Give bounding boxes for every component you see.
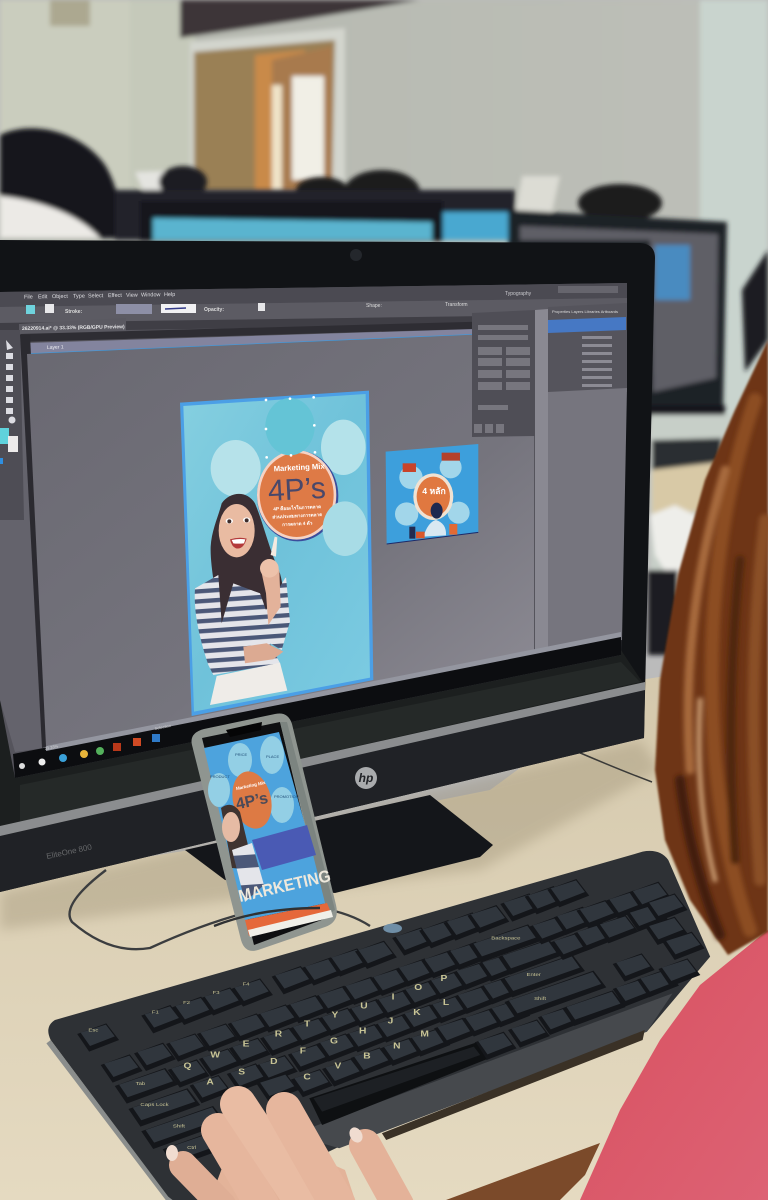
heading badge: 4P คืออะไรในการตลาด — [273, 503, 321, 512]
key legends: S — [238, 1067, 245, 1076]
menu bar: Effect — [108, 293, 122, 299]
control bar — [0, 298, 627, 323]
typing hand — [166, 1104, 398, 1200]
application window — [0, 283, 627, 778]
function key legends: Shift — [534, 997, 547, 1002]
menu bar: File — [24, 294, 33, 301]
function key legends: Backspace — [491, 936, 521, 941]
menu bar — [0, 283, 627, 307]
function key legends: F2 — [183, 1001, 190, 1006]
infographic poster on artboard — [180, 391, 373, 716]
control bar: Transform — [445, 302, 468, 308]
function key legends — [88, 936, 547, 1151]
thumbnail infographic: 4 หลัก: 4 หลัก — [422, 486, 446, 496]
menu bar: View — [126, 293, 138, 299]
function key legends: Caps Lock — [140, 1102, 169, 1108]
key legends: C — [303, 1072, 311, 1081]
silver trim line — [0, 682, 645, 836]
control bar: Stroke: — [65, 309, 83, 315]
control bar: Shape: — [366, 303, 382, 309]
phone circle headings: PLACE — [266, 754, 279, 759]
key legends: D — [270, 1057, 278, 1066]
heading badge: 4P’s — [267, 472, 327, 508]
key legends: Q — [183, 1061, 191, 1070]
menu bar: Edit — [38, 294, 48, 300]
phone circle headings: PRODUCT — [210, 774, 230, 779]
key legends: I — [392, 992, 394, 1001]
background: classroom wall and door — [0, 0, 768, 430]
windows taskbar: Selection — [154, 723, 171, 731]
artboard breadcrumb bar — [26, 327, 540, 354]
function key legends: F3 — [213, 991, 220, 996]
computer monitor — [0, 240, 655, 892]
space bar — [309, 1043, 487, 1125]
circle: right top — [321, 420, 366, 475]
screen — [0, 283, 627, 778]
poster background — [180, 391, 373, 716]
phone cable overlap — [214, 908, 320, 926]
phone footer — [245, 903, 332, 936]
student's pink shirt — [580, 930, 768, 1200]
key legends: K — [413, 1008, 421, 1017]
circle: right lower — [323, 501, 367, 556]
background: classmates and monitors — [0, 128, 768, 655]
monitor stand — [185, 795, 493, 893]
key legends: N — [393, 1041, 401, 1050]
menu bar: Window — [141, 292, 161, 299]
layers panel: Properties Layers Libraries Artboards — [552, 309, 618, 314]
key legends: J — [388, 1016, 393, 1025]
menu bar: Typography — [505, 291, 532, 297]
key legends: H — [359, 1026, 367, 1035]
keyboard — [46, 851, 710, 1200]
smartphone showing the infographic — [192, 713, 337, 951]
fingernails — [166, 1145, 178, 1161]
key legends: R — [275, 1030, 283, 1038]
key legends: Y — [331, 1011, 338, 1019]
illustrator tools panel — [0, 330, 50, 752]
function key legends: Enter — [527, 973, 541, 978]
thumbnail infographic: 4 หลัก — [386, 444, 478, 544]
circle: left — [211, 440, 261, 497]
phone info circles — [208, 736, 294, 823]
phone badge — [227, 767, 277, 833]
monitor bezel — [0, 240, 655, 892]
character panel — [472, 310, 535, 437]
heading badge — [257, 450, 338, 541]
student's long brown hair — [655, 340, 768, 955]
phone badge: 4P’s — [234, 790, 270, 813]
phone woman — [221, 805, 264, 902]
key legends: A — [206, 1077, 214, 1086]
phone badge: Marketing Mix — [235, 780, 266, 791]
key legends: T — [304, 1020, 311, 1028]
function key legends: Shift — [173, 1124, 185, 1129]
key legends: O — [414, 983, 422, 992]
function key legends: F4 — [243, 982, 250, 987]
cable behind the monitor — [578, 752, 652, 782]
palm rest lip — [314, 993, 673, 1148]
hp logo — [355, 767, 377, 789]
key legends: M — [420, 1030, 429, 1038]
lower right panel — [548, 388, 627, 650]
function key legends: Esc — [88, 1028, 99, 1033]
function key legends: Tab — [136, 1081, 145, 1087]
top ruler — [20, 320, 540, 342]
monitor chin — [0, 686, 645, 892]
model label: EliteOne 800 — [46, 842, 93, 861]
key legends: L — [443, 998, 450, 1007]
phone notch — [226, 722, 262, 737]
phone infographic page — [204, 732, 327, 920]
key legends: B — [363, 1051, 371, 1060]
right panel strip — [535, 309, 548, 653]
menu bar: Select — [88, 293, 104, 299]
windows taskbar: 33.33% — [44, 743, 59, 751]
phone marketing title: MARKETING — [237, 866, 332, 906]
hp badge on keyboard — [383, 924, 402, 933]
artboard canvas — [27, 332, 534, 746]
heading badge: Marketing Mix — [273, 462, 326, 473]
document tab: 26220914.ai* @ 33.33% (RGB/GPU Preview) — [22, 324, 125, 332]
hp logo: hp — [359, 771, 373, 785]
heading badge: ส่วนประสมทางการตลาด — [272, 511, 322, 520]
desk surface — [0, 660, 768, 1200]
document tab — [0, 314, 627, 334]
heading badge: การตลาด 4 ตัว — [282, 520, 313, 527]
key legends: E — [243, 1040, 249, 1048]
cable across phone — [70, 870, 370, 949]
key legends: F — [300, 1046, 306, 1055]
phone circle headings — [210, 752, 299, 799]
key legends — [183, 974, 450, 1086]
artboard breadcrumb bar: Layer 1 — [47, 344, 64, 351]
phone bezel reflection — [280, 722, 335, 915]
phone screen — [202, 722, 327, 945]
shadow under monitor — [0, 740, 660, 930]
windows taskbar — [13, 632, 621, 778]
menu bar: Type — [73, 294, 85, 300]
keys — [77, 879, 705, 1167]
webcam — [350, 249, 362, 261]
control bar: Opacity: — [204, 307, 224, 313]
layers panel — [548, 303, 627, 396]
key legends: W — [210, 1050, 220, 1059]
key legends: U — [360, 1001, 368, 1010]
keyboard body — [48, 851, 710, 1200]
menu bar: Object — [52, 294, 68, 300]
function key legends: F1 — [152, 1010, 159, 1015]
key legends: P — [440, 974, 447, 983]
key legends: G — [330, 1036, 338, 1045]
phone circle headings: PRICE — [235, 752, 248, 757]
phone text panel — [252, 825, 316, 870]
key legends: V — [334, 1061, 342, 1070]
function key legends: Ctrl — [187, 1145, 196, 1151]
phone case — [192, 713, 337, 951]
wood edge of desk — [446, 1143, 600, 1200]
phone circle headings: PROMOTION — [274, 794, 299, 799]
circle: selected top — [265, 396, 316, 459]
woman pointing — [195, 494, 290, 705]
menu bar: Help — [164, 292, 175, 298]
